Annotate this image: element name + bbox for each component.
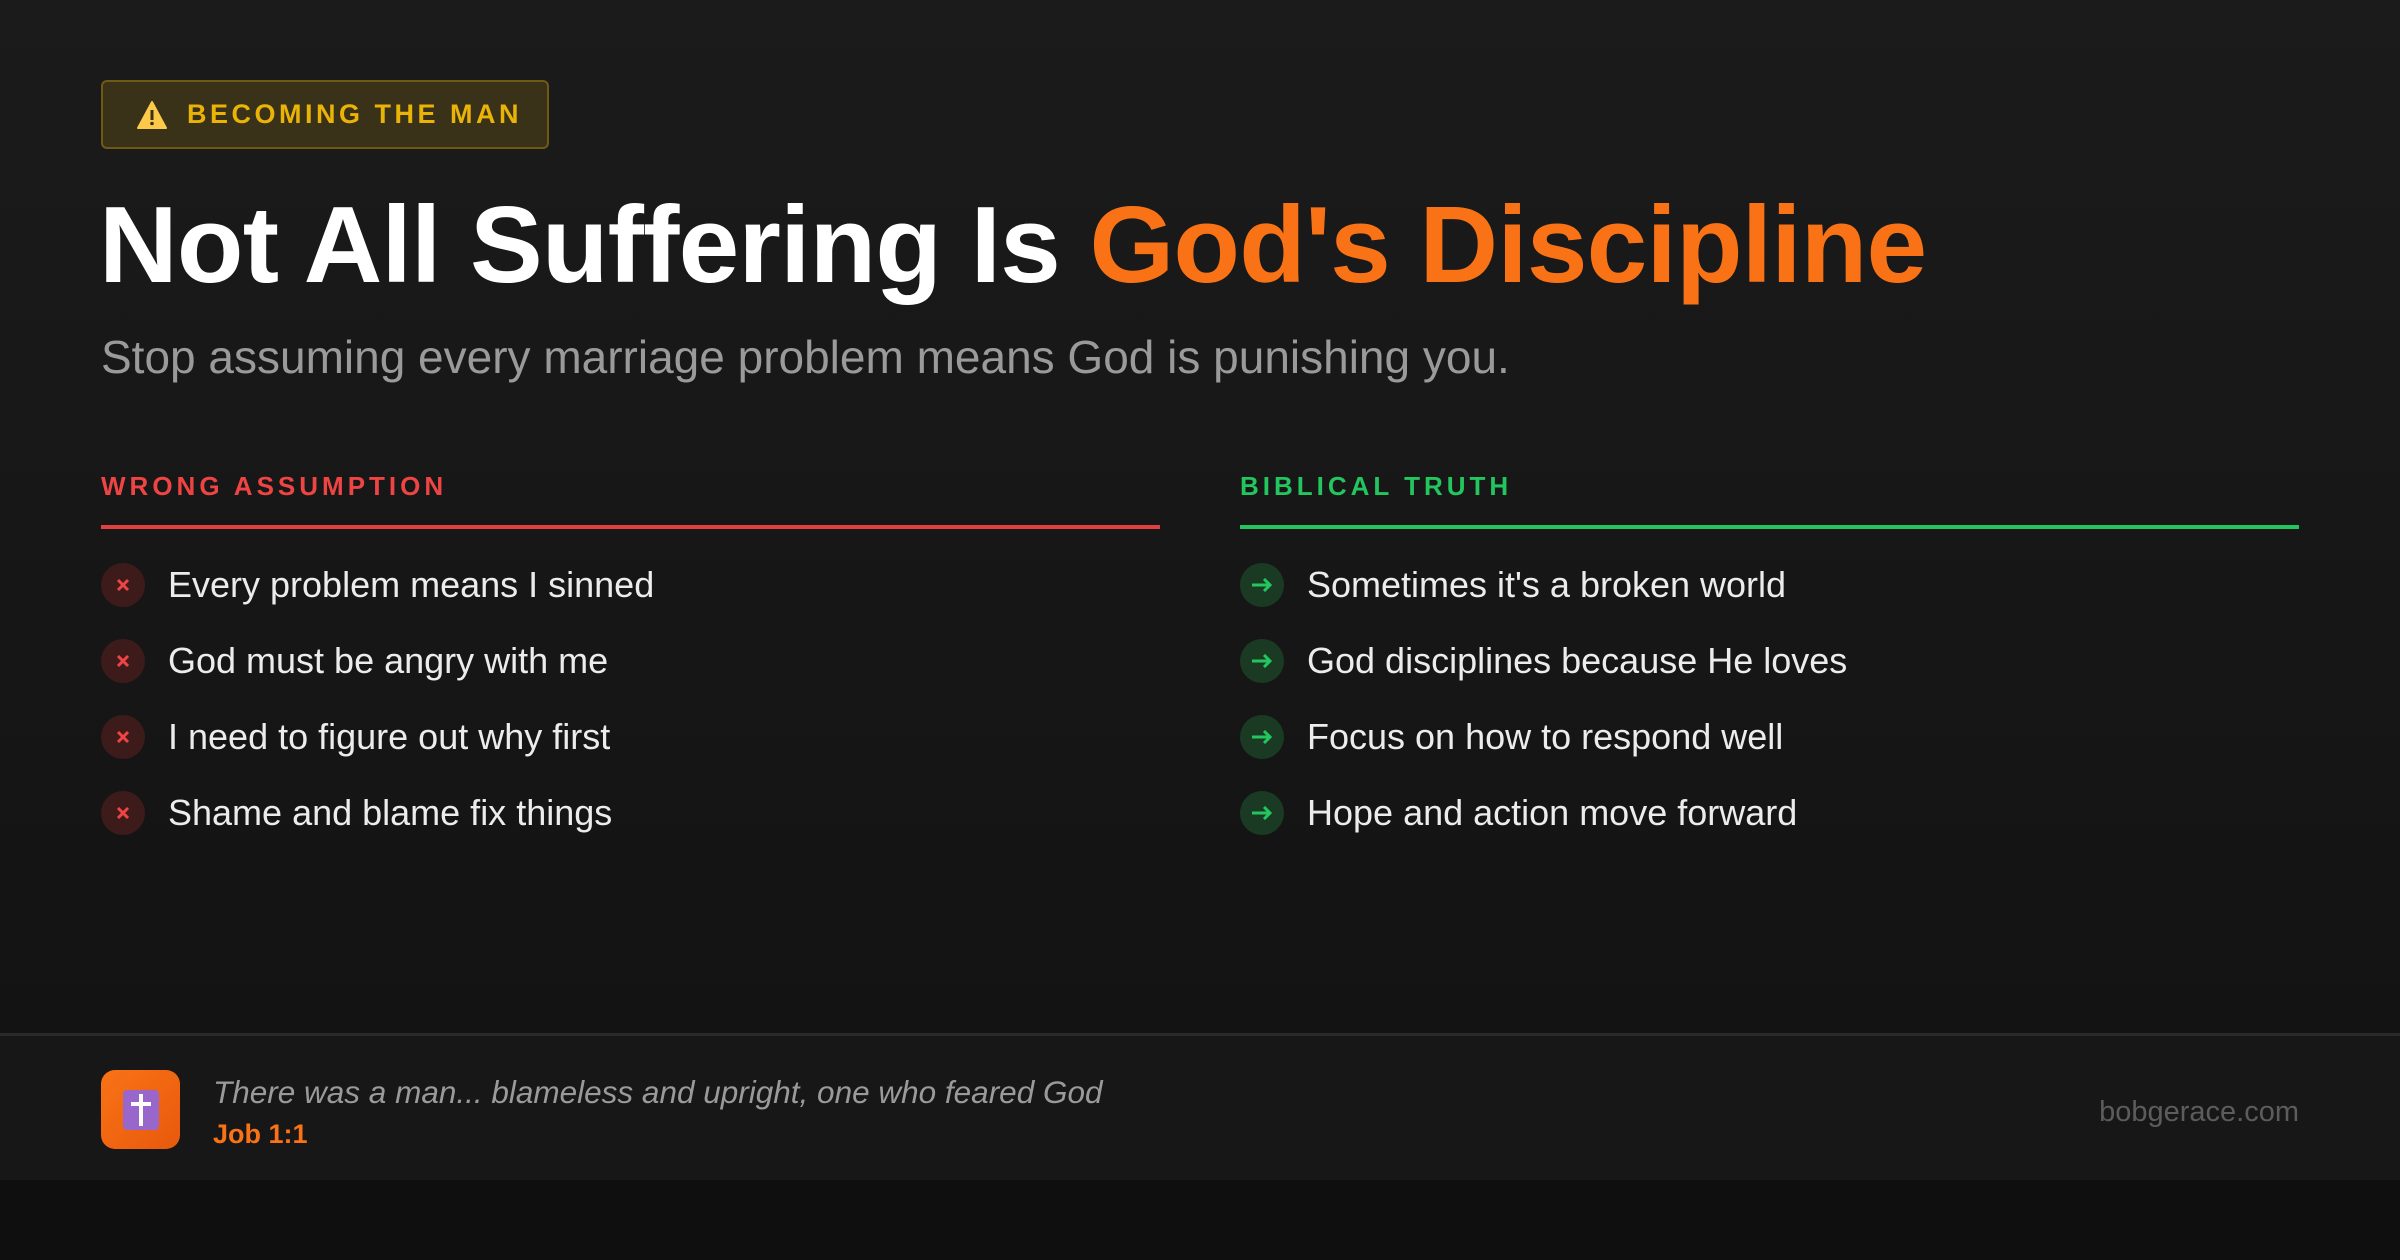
badge	[101, 80, 549, 149]
website: bobgerace.com	[2099, 1096, 2299, 1128]
badge: BECOMING THE MAN	[187, 99, 522, 129]
heading: wrong assumption: WRONG ASSUMPTION	[101, 471, 447, 501]
icon: cross	[101, 1070, 180, 1149]
reference: Job 1:1	[213, 1119, 308, 1149]
panel: biblical truth	[1240, 471, 2299, 835]
footer	[0, 1033, 2400, 1180]
heading: biblical truth	[1240, 471, 2299, 529]
heading: wrong assumption	[101, 471, 1160, 529]
item: Shame and blame fix things	[168, 792, 612, 833]
subtitle: Stop assuming every marriage problem means God is punishing you.	[101, 331, 1510, 383]
item: God must be angry with me	[168, 640, 608, 681]
item: Sometimes it's a broken world	[1307, 564, 1786, 605]
item: God disciplines because He loves	[1307, 640, 1847, 681]
item: Every problem means I sinned	[168, 564, 654, 605]
item: Hope and action move forward	[1307, 792, 1797, 833]
panel: wrong assumption	[101, 471, 1160, 835]
icon: warning	[137, 101, 167, 129]
heading: biblical truth: BIBLICAL TRUTH	[1240, 471, 1512, 501]
title: Not All Suffering Is God's Discipline	[99, 184, 1926, 306]
item: Focus on how to respond well	[1307, 716, 1783, 757]
item: I need to figure out why first	[168, 716, 610, 757]
quote: There was a man... blameless and upright, one who feared God	[213, 1074, 1103, 1110]
